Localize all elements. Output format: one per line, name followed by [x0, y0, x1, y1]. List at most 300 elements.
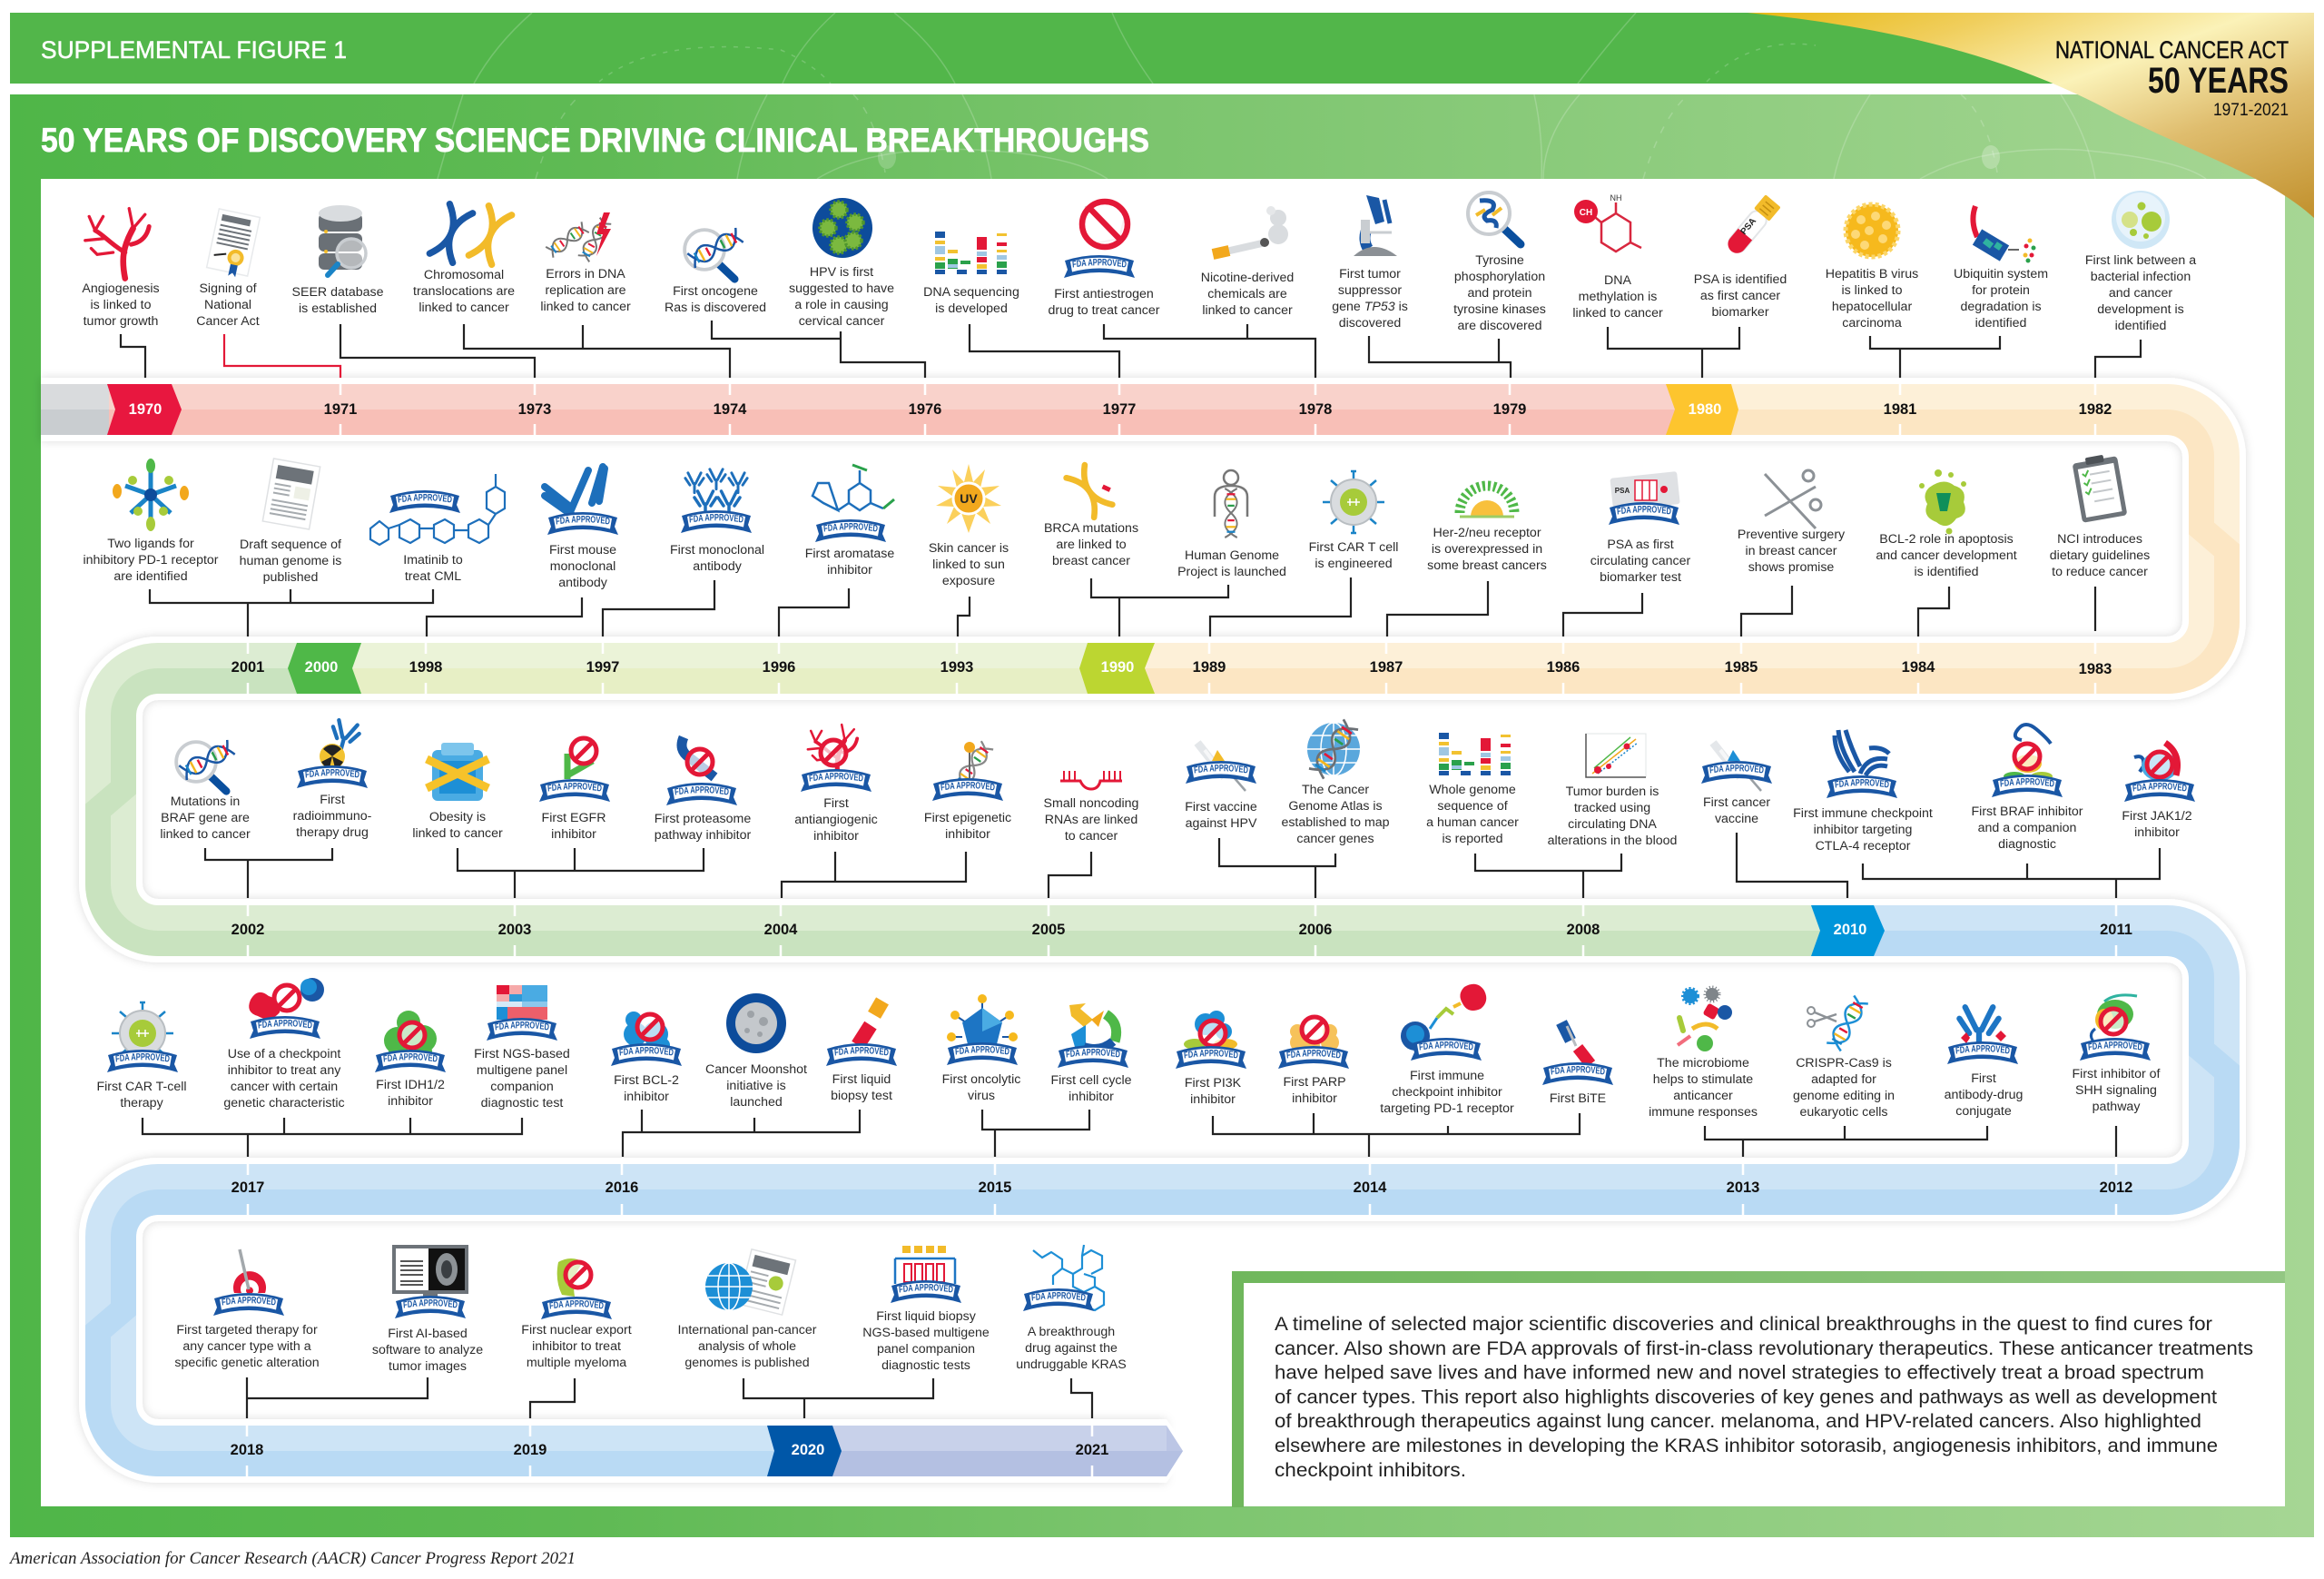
label: signing of National Cancer Act: National	[204, 298, 251, 312]
icon: antiestrogen with FDA badge	[1064, 198, 1135, 278]
icon: checkpoint inhibitor with FDA badge: FDA APPROVED	[258, 1020, 312, 1028]
icon: EGFR inhibitor with FDA badge: FDA APPROVED	[547, 783, 602, 792]
icon: PI3K inhibitor with FDA badge: FDA APPROVED	[1184, 1050, 1238, 1059]
label: bacterial infection: First link between a	[2085, 253, 2196, 268]
label: IDH: First IDH1/2	[376, 1078, 445, 1092]
year labels: 2011	[2100, 922, 2132, 938]
label: oncolytic virus: First oncolytic	[942, 1072, 1020, 1087]
label: hepatitis B: is linked to	[1841, 283, 1903, 298]
icon: SHH inhibitor with FDA badge	[2080, 995, 2151, 1061]
icon: surgical scissors	[1765, 470, 1821, 528]
label: antiangiogenic: First	[823, 796, 849, 811]
year labels: 2008	[1567, 922, 1600, 938]
year labels: 2017	[231, 1179, 264, 1196]
label: hepatitis B: carcinoma	[1842, 316, 1902, 331]
label: EGFR: inhibitor	[551, 827, 596, 842]
label: epigenetic: First epigenetic	[924, 811, 1011, 825]
year labels: 1971	[324, 401, 357, 418]
label: TCGA: established to map	[1281, 815, 1390, 830]
icon: BCL-2 inhibitor with FDA badge	[611, 1012, 682, 1066]
label: tyrosine phosphorylation: and protein	[1467, 286, 1532, 301]
icon: PD-1 checkpoint with FDA badge	[1401, 984, 1486, 1061]
label: bacterial infection: development is	[2097, 302, 2184, 317]
label: aromatase: First aromatase	[805, 547, 894, 561]
icon: HER2 receptor	[1460, 486, 1514, 517]
label: BRCA: BRCA mutations	[1044, 521, 1138, 536]
icon: cigarette and smoke	[1213, 206, 1288, 254]
label: BRAF inhibitor: and a companion	[1978, 821, 2076, 835]
label: first tumor suppressor gene TP53: gene TP53 is	[1332, 300, 1408, 314]
label: DNA methylation: DNA	[1604, 273, 1632, 288]
label: chromosomal translocations: linked to cancer	[419, 301, 509, 315]
label: TCGA: The Cancer	[1302, 783, 1369, 797]
label: HPV: HPV is first	[810, 265, 873, 280]
year labels: 1973	[518, 401, 551, 418]
label: skin cancer: exposure	[942, 574, 995, 588]
label: CRISPR: CRISPR-Cas9 is	[1796, 1056, 1892, 1071]
label: obesity: linked to cancer	[412, 826, 503, 841]
label: nuclear export: First nuclear export	[521, 1323, 632, 1337]
year labels: 2005	[1032, 922, 1065, 938]
year labels: 2014	[1354, 1179, 1387, 1196]
icon: liquid biopsy tube with FDA badge: FDA APPROVED	[834, 1047, 889, 1055]
label: whole genome: is reported	[1442, 832, 1503, 846]
label: proteasome: First proteasome	[655, 812, 751, 826]
label: PARP: inhibitor	[1292, 1091, 1337, 1106]
label: NGS panel: companion	[490, 1080, 554, 1094]
label: tumor burden: circulating DNA	[1568, 817, 1657, 832]
year labels: 1985	[1725, 659, 1758, 676]
icon: targeted therapy with FDA badge	[213, 1249, 284, 1316]
year labels: 1996	[763, 659, 795, 676]
label: skin cancer: Skin cancer is	[929, 541, 1009, 556]
label: radioimmunotherapy: therapy drug	[296, 825, 369, 840]
icon: nuclear export inhibitor with FDA badge	[541, 1258, 612, 1319]
year labels: 2019	[514, 1442, 547, 1458]
label: NCI dietary guidelines: dietary guidelines	[2050, 548, 2150, 563]
label: DNA methylation: linked to cancer	[1572, 306, 1663, 321]
label: cell cycle: inhibitor	[1068, 1090, 1114, 1104]
label: KRAS: drug against the	[1025, 1341, 1118, 1356]
icon: hepatitis B virus	[1846, 204, 1898, 257]
label: PD-1: targeting PD-1 receptor	[1380, 1101, 1514, 1116]
year labels: 1980	[1689, 401, 1721, 418]
year labels: 1974	[714, 401, 747, 418]
label: ubiquitin: for protein	[1972, 283, 2030, 298]
year labels: 1976	[909, 401, 941, 418]
label: Her-2/neu: some breast cancers	[1427, 558, 1547, 573]
year labels: 1990	[1101, 659, 1134, 676]
label: hepatitis B: Hepatitis B virus	[1826, 267, 1918, 281]
label: BCL-2: BCL-2 role in apoptosis	[1879, 532, 2014, 547]
label: tumor burden: alterations in the blood	[1548, 834, 1677, 848]
label: CTLA-4: First immune checkpoint	[1793, 806, 1933, 821]
label: pan-cancer analysis: International pan-cancer	[677, 1323, 817, 1337]
label: CTLA-4: CTLA-4 receptor	[1816, 839, 1911, 854]
label: chromosomal translocations: translocations are	[413, 284, 515, 299]
label: two ligands: are identified	[113, 569, 188, 584]
icon: monoclonal antibodies with FDA badge	[681, 468, 752, 533]
label: AI software: tumor images	[389, 1359, 467, 1374]
icon: DNA sequencing bars	[935, 232, 1007, 274]
label: first tumor suppressor gene TP53: discovered	[1339, 316, 1401, 331]
year labels: 1984	[1902, 659, 1935, 676]
label: skin cancer: linked to sun	[932, 558, 1005, 572]
icon: antibody-drug conjugate with FDA badge: FDA APPROVED	[1955, 1045, 2010, 1053]
summary paragraph: of cancer types. This report also highlights discoveries of key genes and pathways as well as development	[1275, 1386, 2217, 1407]
label: NCI dietary guidelines: to reduce cancer	[2052, 565, 2148, 579]
year labels: 2018	[231, 1442, 263, 1458]
label: CAR T cell: is engineered	[1315, 557, 1393, 571]
label: CRISPR: adapted for	[1811, 1072, 1876, 1087]
year labels: 2000	[305, 659, 338, 676]
label: first mouse monoclonal: First mouse	[549, 543, 616, 558]
label: ubiquitin: Ubiquitin system	[1954, 267, 2048, 281]
connectors: 2002 to 2011	[205, 833, 2160, 898]
icon: liquid biopsy NGS tubes with FDA badge: FDA APPROVED	[899, 1284, 953, 1293]
label: draft human genome: human genome is	[240, 554, 341, 568]
label: nicotine-derived chemicals: Nicotine-derived	[1201, 271, 1294, 285]
label: small noncoding RNAs: Small noncoding	[1044, 796, 1138, 811]
year labels: 1998	[409, 659, 442, 676]
connectors: 1970s to 1982	[121, 321, 2141, 378]
label: moonshot: Cancer Moonshot	[705, 1062, 807, 1077]
label: liquid biopsy test: First liquid	[832, 1072, 891, 1087]
label: CAR T cell: First CAR T cell	[1309, 540, 1398, 555]
icon: microbiome	[1678, 988, 1732, 1051]
icon: proteasome inhibitor with FDA badge: FDA APPROVED	[675, 786, 729, 795]
icon: tyrosine kinase magnifier	[1468, 192, 1521, 244]
label: antiestrogen: drug to treat cancer	[1048, 303, 1160, 318]
label: antiangiogenic: inhibitor	[813, 829, 859, 844]
icon: PD-1 ligands	[113, 459, 189, 531]
icon: cancer genome atlas globe	[1307, 719, 1360, 779]
icon: PI3K inhibitor with FDA badge	[1176, 1011, 1246, 1069]
label: cancer vaccine: First cancer	[1703, 795, 1770, 810]
icon: PARP inhibitor with FDA badge	[1278, 1017, 1349, 1069]
year labels: 1978	[1299, 401, 1332, 418]
icon: Human Genome person	[1215, 470, 1247, 538]
label: SEER database: is established	[299, 301, 377, 316]
label: aromatase: inhibitor	[827, 563, 872, 577]
label: targeted therapy: specific genetic alteration	[174, 1356, 320, 1370]
connectors: 1983 to 2001	[150, 577, 2095, 637]
label: liquid biopsy test: biopsy test	[831, 1089, 892, 1103]
label: proteasome: pathway inhibitor	[655, 828, 752, 843]
label: PSA circulating test: PSA as first	[1607, 538, 1674, 552]
icon: oncolytic virus with FDA badge: FDA APPROVED	[955, 1046, 1009, 1055]
year labels: 2016	[606, 1179, 638, 1196]
connectors: 2018 to 2021	[247, 1377, 1092, 1418]
icon: AI monitor with FDA badge	[392, 1245, 468, 1318]
label: first tumor suppressor gene TP53: First tumor	[1339, 267, 1401, 281]
label: BiTE: First BiTE	[1550, 1091, 1606, 1106]
footer source credit: American Association for Cancer Research (AACR) Cancer Progress Report 2021	[8, 1549, 576, 1568]
icon: cancer vaccine syringe with FDA badge: FDA APPROVED	[1709, 765, 1764, 774]
label: tyrosine phosphorylation: phosphorylation	[1454, 270, 1545, 284]
label: two ligands: Two ligands for	[107, 537, 194, 551]
icon: PSA test with FDA badge: PSA	[1615, 487, 1630, 495]
label: targeted therapy: any cancer type with a	[182, 1339, 311, 1354]
panel: summary text box	[1232, 1271, 2285, 1507]
label: liquid biopsy NGS: diagnostic tests	[881, 1358, 970, 1373]
label: PSA biomarker: as first cancer	[1700, 289, 1780, 303]
icon: draft genome paper	[262, 459, 320, 529]
year labels: 1997	[586, 659, 619, 676]
icon: IDH inhibitor with FDA badge: FDA APPROVED	[383, 1053, 438, 1062]
label: imatinib: treat CML	[405, 569, 461, 584]
summary paragraph: checkpoint inhibitors.	[1275, 1459, 1466, 1481]
label: TCGA: cancer genes	[1296, 832, 1374, 846]
icon: cancer vaccine syringe with FDA badge	[1701, 741, 1772, 792]
icon: checkpoint inhibitor with FDA badge	[249, 978, 324, 1039]
label: ADC: antibody-drug	[1945, 1088, 2023, 1102]
label: NCI dietary guidelines: NCI introduces	[2057, 532, 2142, 547]
year labels: 2012	[2100, 1179, 2132, 1196]
label: draft human genome: Draft sequence of	[240, 538, 341, 552]
year labels: 1977	[1103, 401, 1136, 418]
icon: CAR T cell	[1323, 471, 1384, 533]
label: HPV: a role in causing	[794, 298, 889, 312]
year labels: 2001	[231, 659, 264, 676]
label: ubiquitin: degradation is	[1960, 300, 2042, 314]
icon: DNA methylation molecule: CH	[1580, 208, 1592, 218]
label: preventive surgery: in breast cancer	[1746, 544, 1837, 558]
label: moonshot: launched	[730, 1095, 783, 1110]
icon: radioimmunotherapy with FDA badge	[297, 717, 368, 788]
label: PD-1: checkpoint inhibitor	[1392, 1085, 1502, 1100]
label: BCL-2 inhibitor: First BCL-2	[614, 1073, 679, 1088]
milestone flag: 2000	[288, 643, 361, 694]
icon: EGFR inhibitor with FDA badge	[539, 735, 610, 802]
icon: radioimmunotherapy with FDA badge: FDA APPROVED	[305, 769, 359, 777]
label: BRAF mutations: Mutations in	[171, 794, 240, 809]
icon: microscope	[1354, 195, 1397, 256]
label: PSA biomarker: PSA is identified	[1694, 272, 1787, 287]
icon: liquid biopsy NGS tubes with FDA badge	[891, 1246, 961, 1303]
icon: chromosomes	[429, 204, 512, 264]
label: tyrosine phosphorylation: are discovered	[1457, 319, 1542, 333]
label: BRCA: breast cancer	[1052, 554, 1130, 568]
label: ADC: conjugate	[1955, 1104, 2012, 1119]
icon: monoclonal antibodies with FDA badge: FDA APPROVED	[689, 514, 743, 523]
label: bacterial infection: identified	[2115, 319, 2166, 333]
timeline ribbon	[41, 384, 2227, 1483]
label: PD-1: First immune	[1410, 1069, 1484, 1083]
label: BRAF inhibitor: diagnostic	[1998, 837, 2056, 852]
icon: mouse antibody with FDA badge	[541, 463, 618, 535]
icon: UV sun: UV	[960, 491, 978, 506]
label: hepatitis B: hepatocellular	[1832, 300, 1912, 314]
label: microbiome: anticancer	[1673, 1089, 1733, 1103]
label: BCL-2 inhibitor: inhibitor	[624, 1090, 669, 1104]
year labels: 1993	[940, 659, 973, 676]
label: checkpoint genetic: cancer with certain	[231, 1080, 338, 1094]
summary paragraph: elsewhere are milestones in developing the KRAS inhibitor sotorasib, angiogenesis inhibitors, and immune	[1275, 1435, 2218, 1456]
label: ADC: First	[1971, 1071, 1996, 1086]
label: errors in DNA replication: linked to cancer	[540, 300, 631, 314]
label: microbiome: The microbiome	[1657, 1056, 1749, 1071]
icon: magnifier over DNA, Ras	[684, 228, 743, 279]
icon: cell cycle with FDA badge: FDA APPROVED	[1066, 1049, 1120, 1057]
icon: CRISPR scissors on DNA	[1807, 996, 1868, 1051]
gold anniversary corner	[1748, 13, 2314, 218]
year labels: 1981	[1884, 401, 1916, 418]
label: signing of National Cancer Act: Signing of	[199, 281, 257, 296]
label: whole genome: Whole genome	[1429, 783, 1516, 797]
label: EGFR: First EGFR	[542, 811, 606, 825]
year labels: 1986	[1547, 659, 1580, 676]
label: liquid biopsy NGS: NGS-based multigene	[862, 1326, 990, 1340]
icon: SEER database	[319, 205, 366, 275]
label: antiangiogenic: antiangiogenic	[794, 813, 878, 827]
label: first mouse monoclonal: monoclonal	[550, 559, 615, 574]
label: DNA sequencing: DNA sequencing	[923, 285, 1019, 300]
year labels: 1982	[2079, 401, 2112, 418]
icon: BCL-2 inhibitor with FDA badge: FDA APPROVED	[619, 1047, 674, 1055]
icon: KRAS drug molecule with FDA badge: FDA APPROVED	[1031, 1292, 1086, 1300]
icon: DNA methylation molecule	[1574, 193, 1641, 252]
label: KRAS: A breakthrough	[1028, 1325, 1115, 1339]
label: tumor burden: tracked using	[1574, 801, 1650, 815]
label: radioimmunotherapy: radioimmuno-	[293, 809, 372, 824]
label: angiogenesis: Angiogenesis	[82, 281, 160, 296]
icon: proteasome inhibitor with FDA badge	[666, 735, 737, 805]
label: PI3K: First PI3K	[1185, 1076, 1242, 1090]
label: NGS panel: multigene panel	[477, 1063, 567, 1078]
label: nuclear export: multiple myeloma	[527, 1356, 626, 1370]
icon: IDH inhibitor with FDA badge	[375, 1011, 446, 1072]
label: PSA biomarker: biomarker	[1711, 305, 1769, 320]
icon: moonshot	[726, 993, 786, 1053]
icon: UV sun	[936, 464, 1001, 533]
icon: ubiquitin protein degradation	[1973, 206, 2035, 263]
label: pan-cancer analysis: genomes is published	[684, 1356, 810, 1370]
label: microbiome: helps to stimulate	[1653, 1072, 1753, 1087]
label: errors in DNA replication: Errors in DNA	[546, 267, 625, 281]
milestone flag: 1990	[1079, 643, 1155, 694]
label: PSA circulating test: circulating cancer	[1590, 554, 1690, 568]
label: DNA methylation: methylation is	[1579, 290, 1657, 304]
icon: JAK1/2 inhibitor with FDA badge: FDA APPROVED	[2132, 783, 2187, 792]
label: tumor burden: Tumor burden is	[1566, 785, 1659, 799]
year labels: 1979	[1493, 401, 1526, 418]
icon: tumor burden chart	[1586, 734, 1646, 777]
text: 1971-2021: 1971-2021	[2213, 101, 2289, 120]
label: SHH: SHH signaling	[2075, 1083, 2157, 1098]
label: CAR T therapy: therapy	[120, 1096, 164, 1110]
icon: aromatase inhibitor molecule with FDA badge	[812, 463, 895, 542]
label: NGS panel: diagnostic test	[481, 1096, 563, 1110]
label: first tumor suppressor gene TP53: suppressor	[1338, 283, 1402, 298]
label: first monoclonal: antibody	[693, 559, 743, 574]
label: imatinib: Imatinib to	[403, 553, 463, 567]
label: epigenetic: inhibitor	[945, 827, 990, 842]
label: Her-2/neu: is overexpressed in	[1432, 542, 1542, 557]
label: SHH: First inhibitor of	[2073, 1067, 2161, 1081]
icon: HPV vaccine syringe with FDA badge: FDA APPROVED	[1194, 765, 1248, 774]
icon: epigenetic inhibitor with FDA badge: FDA APPROVED	[940, 782, 995, 790]
icon: BRAF inhibitor with FDA badge	[1992, 723, 2063, 797]
year labels: 2015	[979, 1179, 1011, 1196]
label: errors in DNA replication: replication are	[545, 283, 626, 298]
year labels: 2002	[231, 922, 264, 938]
label: TCGA: Genome Atlas is	[1288, 799, 1383, 814]
label: first mouse monoclonal: antibody	[558, 576, 608, 590]
milestone flag: 1980	[1666, 384, 1738, 435]
label: PARP: First PARP	[1283, 1075, 1346, 1090]
label: pan-cancer analysis: analysis of whole	[698, 1339, 796, 1354]
label: draft human genome: published	[263, 570, 318, 585]
label: ubiquitin: identified	[1975, 316, 2026, 331]
label: first monoclonal: First monoclonal	[670, 543, 764, 558]
header bar	[10, 13, 2314, 84]
icon: pan-cancer globe and paper	[705, 1249, 796, 1315]
icon: obesity scale and tape	[427, 743, 488, 801]
label: antiestrogen: First antiestrogen	[1054, 287, 1154, 301]
year labels: 1987	[1370, 659, 1403, 676]
label: BRAF mutations: linked to cancer	[160, 827, 251, 842]
page title: 50 YEARS OF DISCOVERY SCIENCE DRIVING CLINICAL BREAKTHROUGHS	[41, 122, 1149, 159]
label: microbiome: immune responses	[1649, 1105, 1758, 1120]
year labels: 2006	[1299, 922, 1332, 938]
year labels: 2004	[764, 922, 798, 938]
label: moonshot: initiative is	[726, 1079, 786, 1093]
year labels: 2021	[1076, 1442, 1108, 1458]
icon: HPV particles	[812, 198, 872, 258]
label: chromosomal translocations: Chromosomal	[424, 268, 504, 282]
text: 50 years: 50 YEARS	[2148, 61, 2289, 101]
year labels: 2020	[792, 1442, 824, 1458]
label: angiogenesis: is linked to	[90, 298, 152, 312]
label: CTLA-4: inhibitor targeting	[1814, 823, 1912, 837]
label: CRISPR: genome editing in	[1793, 1089, 1895, 1103]
icon: BiTE with FDA badge: FDA APPROVED	[1551, 1066, 1605, 1075]
icon: DNA methylation molecule: NH	[1610, 193, 1621, 202]
label: nicotine-derived chemicals: chemicals are	[1207, 287, 1287, 301]
icon: clipboard	[2072, 452, 2127, 523]
label: DNA sequencing: is developed	[935, 301, 1008, 316]
icon: PARP inhibitor with FDA badge: FDA APPROVED	[1286, 1050, 1341, 1059]
icon: PSA test with FDA badge	[1609, 472, 1679, 525]
icon: aromatase inhibitor molecule with FDA badge: FDA APPROVED	[823, 523, 878, 532]
label: JAK1/2: First JAK1/2	[2122, 809, 2192, 824]
label: PI3K: inhibitor	[1190, 1092, 1236, 1107]
label: Human Genome Project: Project is launched	[1177, 565, 1286, 579]
icon: mouse antibody with FDA badge: FDA APPROVED	[556, 516, 610, 525]
icon: CTLA-4 receptor with FDA badge: FDA APPROVED	[1835, 779, 1889, 788]
icon: antiangiogenic inhibitor with FDA badge	[801, 723, 872, 792]
icon: small noncoding RNA	[1060, 771, 1122, 789]
label: small noncoding RNAs: RNAs are linked	[1045, 813, 1137, 827]
icon: signed document	[206, 209, 260, 280]
label: checkpoint genetic: inhibitor to treat any	[228, 1063, 341, 1078]
label: checkpoint genetic: genetic characteristic	[223, 1096, 345, 1110]
icon: BCL-2 apoptosis blob	[1919, 469, 1966, 534]
label: cancer vaccine: vaccine	[1715, 812, 1758, 826]
icon: JAK1/2 inhibitor with FDA badge	[2124, 740, 2195, 802]
icon: BRCA chromosome	[1067, 465, 1112, 518]
label: BRAF mutations: BRAF gene are	[161, 811, 250, 825]
label: liquid biopsy NGS: First liquid biopsy	[876, 1309, 977, 1324]
year labels: 1983	[2079, 661, 2112, 677]
label: oncolytic virus: virus	[968, 1089, 995, 1103]
icon: antiestrogen with FDA badge: FDA APPROVED	[1072, 259, 1127, 267]
label: BRCA: are linked to	[1056, 538, 1127, 552]
label: signing of National Cancer Act: Cancer Act	[196, 314, 260, 329]
label: radioimmunotherapy: First	[320, 793, 345, 807]
label: preventive surgery: Preventive surgery	[1738, 528, 1846, 542]
